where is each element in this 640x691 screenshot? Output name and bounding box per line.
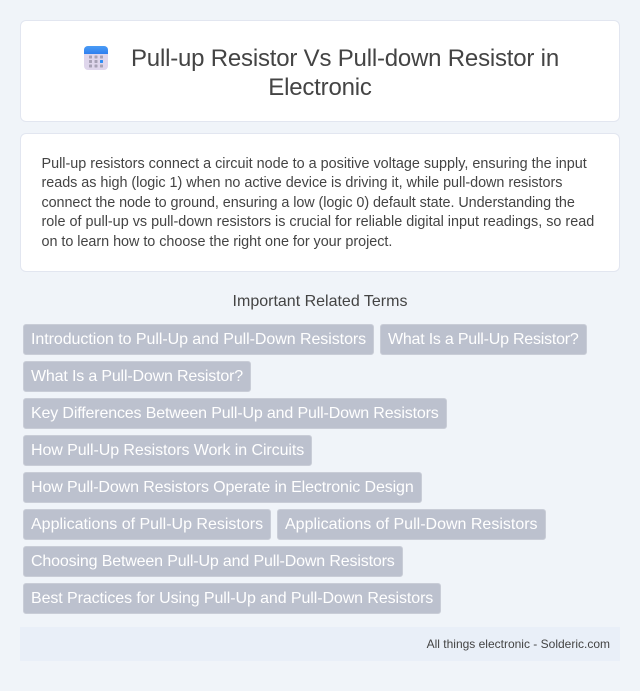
icon: calendar grid [84,46,108,70]
chip: applications pull-down: Applications of Pull-Down Resistors [285,516,538,533]
chip: key differences [23,398,447,429]
chip: how pull-up works [23,435,312,466]
chip: how pull-down operates: How Pull-Down Resistors Operate in Electronic Design [31,479,414,496]
panel: description [20,133,620,272]
description text [42,156,594,250]
footer [20,627,620,661]
chip: what is pull-up [380,324,587,355]
chip: introduction [23,324,374,355]
chip: introduction: Introduction to Pull-Up and Pull-Down Resistors [31,331,366,348]
chip: how pull-up works: How Pull-Up Resistors Work in Circuits [31,442,304,459]
description text: Pull-up resistors connect a circuit node to a positive voltage supply, ensuring the input [42,156,587,172]
chip: what is pull-down: What Is a Pull-Down Resistor? [31,368,243,385]
footer text: All things electronic - Solderic.com [427,637,610,651]
heading: related terms: Important Related Terms [233,293,407,310]
title: Pull-up Resistor Vs Pull-down Resistor in [131,45,559,72]
chip: what is pull-up: What Is a Pull-Up Resistor? [388,331,579,348]
chip: key differences: Key Differences Between Pull-Up and Pull-Down Resistors [31,405,439,422]
chip: choosing [23,546,403,577]
chip: how pull-down operates [23,472,422,503]
title [131,45,559,101]
description text: role of pull-up vs pull-down resistors is crucial for reliable digital input readings, so read [42,214,594,230]
chip: best practices: Best Practices for Using Pull-Up and Pull-Down Resistors [31,590,433,607]
chip: applications pull-down [277,509,546,540]
description text: connect the node to ground, ensuring a low (logic 0) default state. Understanding the [42,195,575,211]
description text: on to learn how to choose the right one for your project. [42,234,392,250]
title: Electronic [268,74,372,101]
chip: applications pull-up [23,509,271,540]
chip: applications pull-up: Applications of Pull-Up Resistors [31,516,263,533]
chip: what is pull-down [23,361,251,392]
description text: reads as high (logic 1) when no active device is driving it, while pull-down resistors [42,175,562,191]
panel: title card [20,20,620,122]
chip: best practices [23,583,441,614]
chip: choosing: Choosing Between Pull-Up and Pull-Down Resistors [31,553,395,570]
